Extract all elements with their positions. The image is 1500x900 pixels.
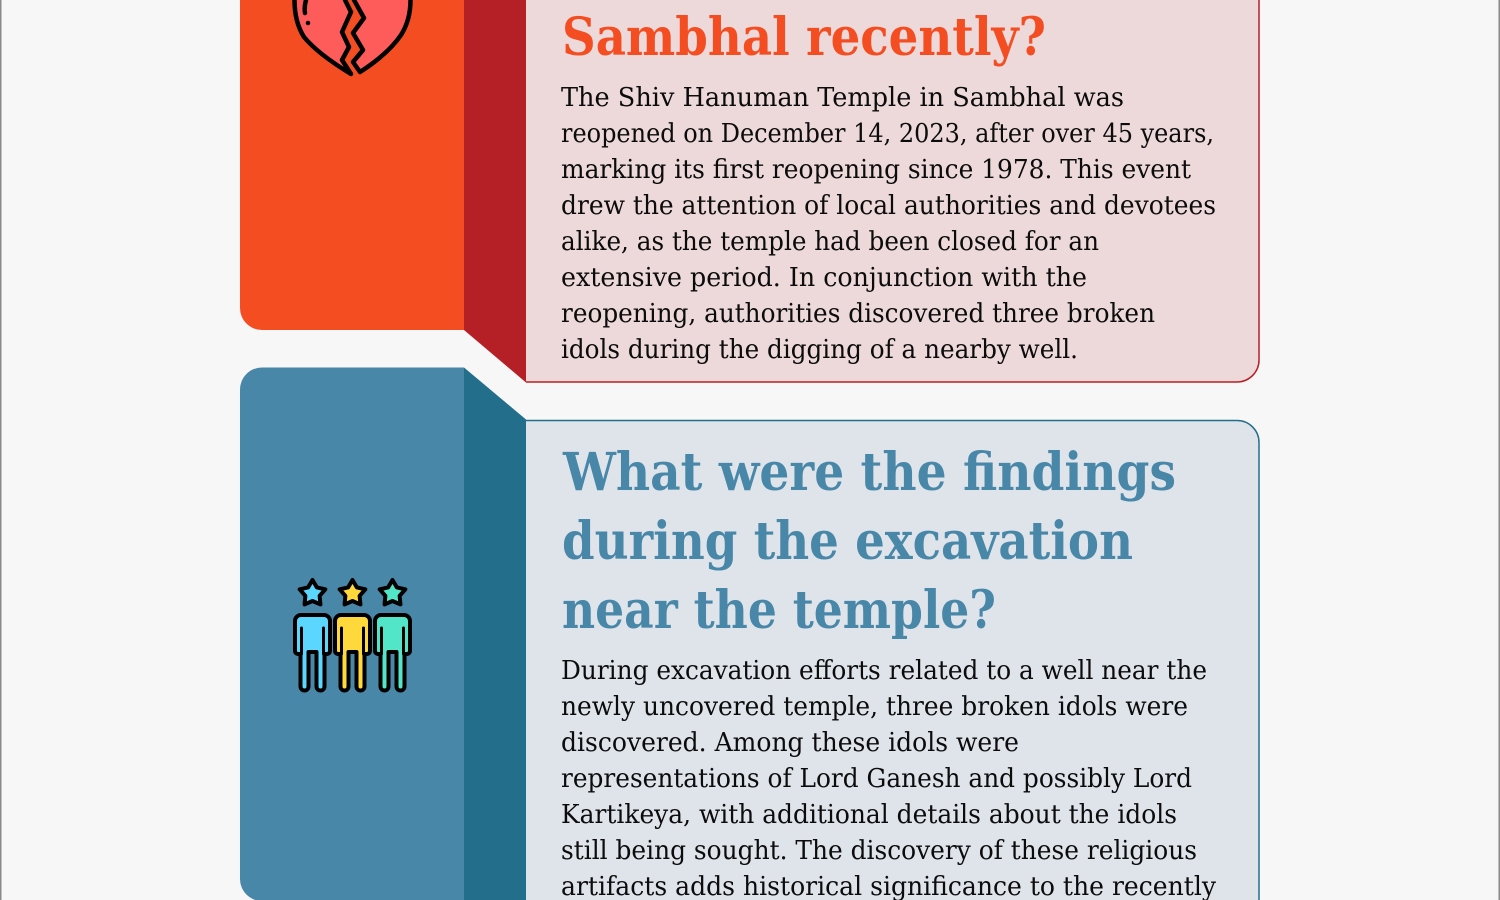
text block: broken idols: representations of Lord Ganesh and possibly Lord [561, 763, 1192, 794]
text block: broken idols: discovered. Among these idols were [561, 727, 1019, 758]
heading: excavation findings [562, 442, 1176, 641]
icon: broken heart [294, 0, 410, 74]
dark red fold [464, 0, 526, 382]
blue-grey text card [526, 420, 1259, 900]
heading: excavation findings: What were the findings [562, 442, 1176, 503]
text block: broken idols: newly uncovered temple, three broken idols were [561, 691, 1188, 722]
text block: temple reopening: reopening, authorities discovered three broken [561, 298, 1155, 329]
panel: recent event in Sambhal [240, 0, 1259, 382]
panel: excavation findings [240, 368, 1259, 900]
text block: temple reopening: reopened on December 14, 2023, after over 45 years, [561, 118, 1214, 149]
text block: temple reopening: extensive period. In conjunction with the [561, 262, 1087, 293]
dark teal fold [464, 368, 526, 900]
text block: temple reopening [561, 82, 1216, 365]
blue icon block [240, 368, 464, 900]
text block: broken idols: During excavation efforts related to a well near the [561, 655, 1207, 686]
heading: excavation findings: during the excavation [562, 511, 1133, 572]
text block: temple reopening: The Shiv Hanuman Temple in Sambhal was [561, 82, 1124, 113]
person with blue star [295, 580, 330, 690]
text block: temple reopening: marking its first reopening since 1978. This event [561, 154, 1191, 185]
text block: broken idols: still being sought. The discovery of these religious [561, 835, 1197, 866]
icon: three people with stars [295, 580, 410, 690]
text block: temple reopening: idols during the digging of a nearby well. [561, 334, 1078, 365]
text block: temple reopening: drew the attention of local authorities and devotees [561, 190, 1216, 221]
pink text card [526, 0, 1259, 382]
person with yellow star [335, 580, 370, 690]
heading: Sambhal recently: Sambhal recently? [562, 7, 1046, 68]
orange icon block [240, 0, 464, 330]
heading: excavation findings: near the temple? [562, 580, 996, 641]
text block: broken idols: Kartikeya, with additional details about the idols [561, 799, 1177, 830]
person with green star [375, 580, 410, 690]
text block: broken idols [561, 655, 1216, 900]
text block: temple reopening: alike, as the temple had been closed for an [561, 226, 1099, 257]
